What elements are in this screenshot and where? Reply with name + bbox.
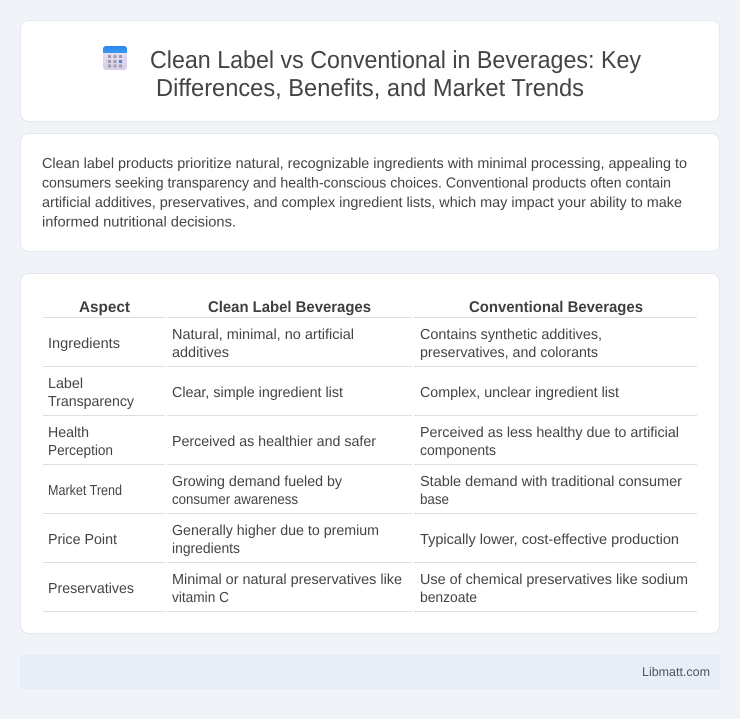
table row: price point: Typically lower, cost-effective production xyxy=(420,532,679,548)
table row: health perception: Perceived as healthier and safer xyxy=(172,434,376,450)
panel: introduction xyxy=(20,134,720,252)
table row: market trend: base xyxy=(420,492,449,508)
table row: health perception xyxy=(43,425,697,464)
panel: title card xyxy=(20,20,720,122)
table row: health perception: Perceived as less healthy due to artificial xyxy=(420,425,679,441)
table row: market trend: Market Trend xyxy=(48,483,122,499)
table row: market trend: Growing demand fueled by xyxy=(172,474,343,490)
text block: introduction: artificial additives, preservatives, and complex ingredient lists, which may impact your ability to make xyxy=(42,195,682,211)
table row: price point xyxy=(43,523,697,562)
table row: health perception: Health xyxy=(48,425,89,441)
text block: introduction: Clean label products prioritize natural, recognizable ingredients with minimal processing, appealing to xyxy=(42,156,687,172)
table row: ingredients: additives xyxy=(172,345,229,361)
table row: price point: ingredients xyxy=(172,541,240,557)
table row: label transparency: Clear, simple ingredient list xyxy=(172,385,343,401)
title xyxy=(150,47,642,102)
icon: calendar xyxy=(103,46,127,70)
footer xyxy=(20,655,720,689)
table row: ingredients: preservatives, and colorants xyxy=(420,345,598,361)
text block: introduction: informed nutritional decisions. xyxy=(42,214,236,230)
table row: market trend: Stable demand with traditional consumer xyxy=(420,474,682,490)
table row: label transparency: Transparency xyxy=(48,394,135,410)
table row: preservatives: Preservatives xyxy=(48,581,134,597)
table row: preservatives: Use of chemical preservatives like sodium xyxy=(420,572,688,588)
table row: health perception: Perception xyxy=(48,443,113,459)
table row: market trend: consumer awareness xyxy=(172,492,298,508)
table header: Aspect xyxy=(79,299,130,316)
table row: health perception: components xyxy=(420,443,496,459)
table header: Conventional Beverages xyxy=(469,299,643,316)
table header: Clean Label Beverages xyxy=(208,299,371,316)
table row: preservatives: benzoate xyxy=(420,590,477,606)
table header xyxy=(43,299,697,318)
text block: introduction xyxy=(42,156,687,230)
table row: price point: Generally higher due to premium xyxy=(172,523,379,539)
table row: ingredients: Natural, minimal, no artificial xyxy=(172,327,354,343)
panel: comparison table xyxy=(20,274,720,634)
table row: preservatives: vitamin C xyxy=(172,590,229,606)
table row: preservatives: Minimal or natural preservatives like xyxy=(172,572,402,588)
title: Clean Label vs Conventional in Beverages: Key xyxy=(150,47,642,74)
table row: preservatives xyxy=(43,572,697,612)
table row: label transparency: Complex, unclear ingredient list xyxy=(420,385,619,401)
table row: label transparency xyxy=(43,376,697,416)
table row: ingredients xyxy=(43,327,697,366)
footer: Libmatt.com xyxy=(642,665,710,679)
title: Differences, Benefits, and Market Trends xyxy=(156,75,584,102)
table row: price point: Price Point xyxy=(48,532,117,548)
table row: ingredients: Ingredients xyxy=(48,336,120,352)
text block: introduction: consumers seeking transparency and health-conscious choices. Conventional products often contain xyxy=(42,176,671,192)
table row: label transparency: Label xyxy=(48,376,83,392)
table row: market trend xyxy=(43,474,697,514)
table row: ingredients: Contains synthetic additives, xyxy=(420,327,602,343)
